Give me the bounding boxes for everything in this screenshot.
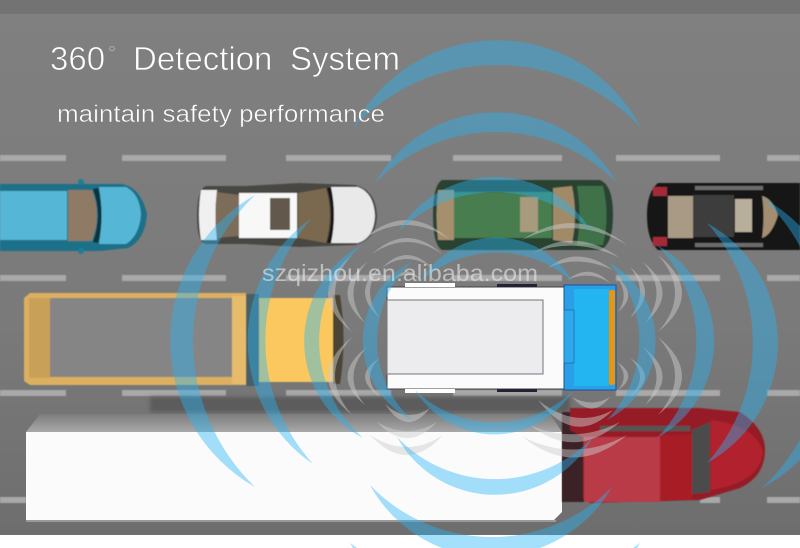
title: ° <box>108 43 116 65</box>
watermark: szqizhou.en.alibaba.com <box>262 260 538 286</box>
sensor waves: grey ultrasonic arcs <box>328 220 682 458</box>
arcs: right upper corner <box>617 255 682 332</box>
lane markings <box>0 155 800 503</box>
arcs: left lower corner <box>328 337 380 415</box>
arcs: bottom left corner <box>370 404 443 455</box>
arcs: bottom right corner <box>523 397 627 458</box>
vehicle: centre truck with blue cab <box>387 283 616 393</box>
vehicle: yellow truck <box>24 293 344 386</box>
vehicle: green car <box>433 180 613 250</box>
vehicle: black car <box>647 183 800 250</box>
title: System <box>290 40 400 77</box>
arcs: top right corner <box>522 223 627 283</box>
arcs: top left corner <box>362 220 450 281</box>
vehicle: white trailer truck <box>26 414 562 522</box>
vehicle: blue car <box>0 179 147 254</box>
sensor waves: blue radar crescents <box>170 40 800 548</box>
crescents: right <box>607 198 800 488</box>
vehicle: white car <box>197 183 377 247</box>
crescents: bottom <box>350 390 640 548</box>
crescents: left <box>170 195 412 487</box>
subtitle: maintain safety performance <box>57 101 385 128</box>
arcs: left upper corner <box>328 255 380 332</box>
shadow above trailer <box>150 397 570 412</box>
crescents: top <box>353 40 641 282</box>
title: 360 <box>50 40 105 77</box>
vehicle: red pickup cab <box>562 408 765 503</box>
arcs: right lower corner <box>617 337 682 415</box>
title: Detection <box>133 40 272 77</box>
